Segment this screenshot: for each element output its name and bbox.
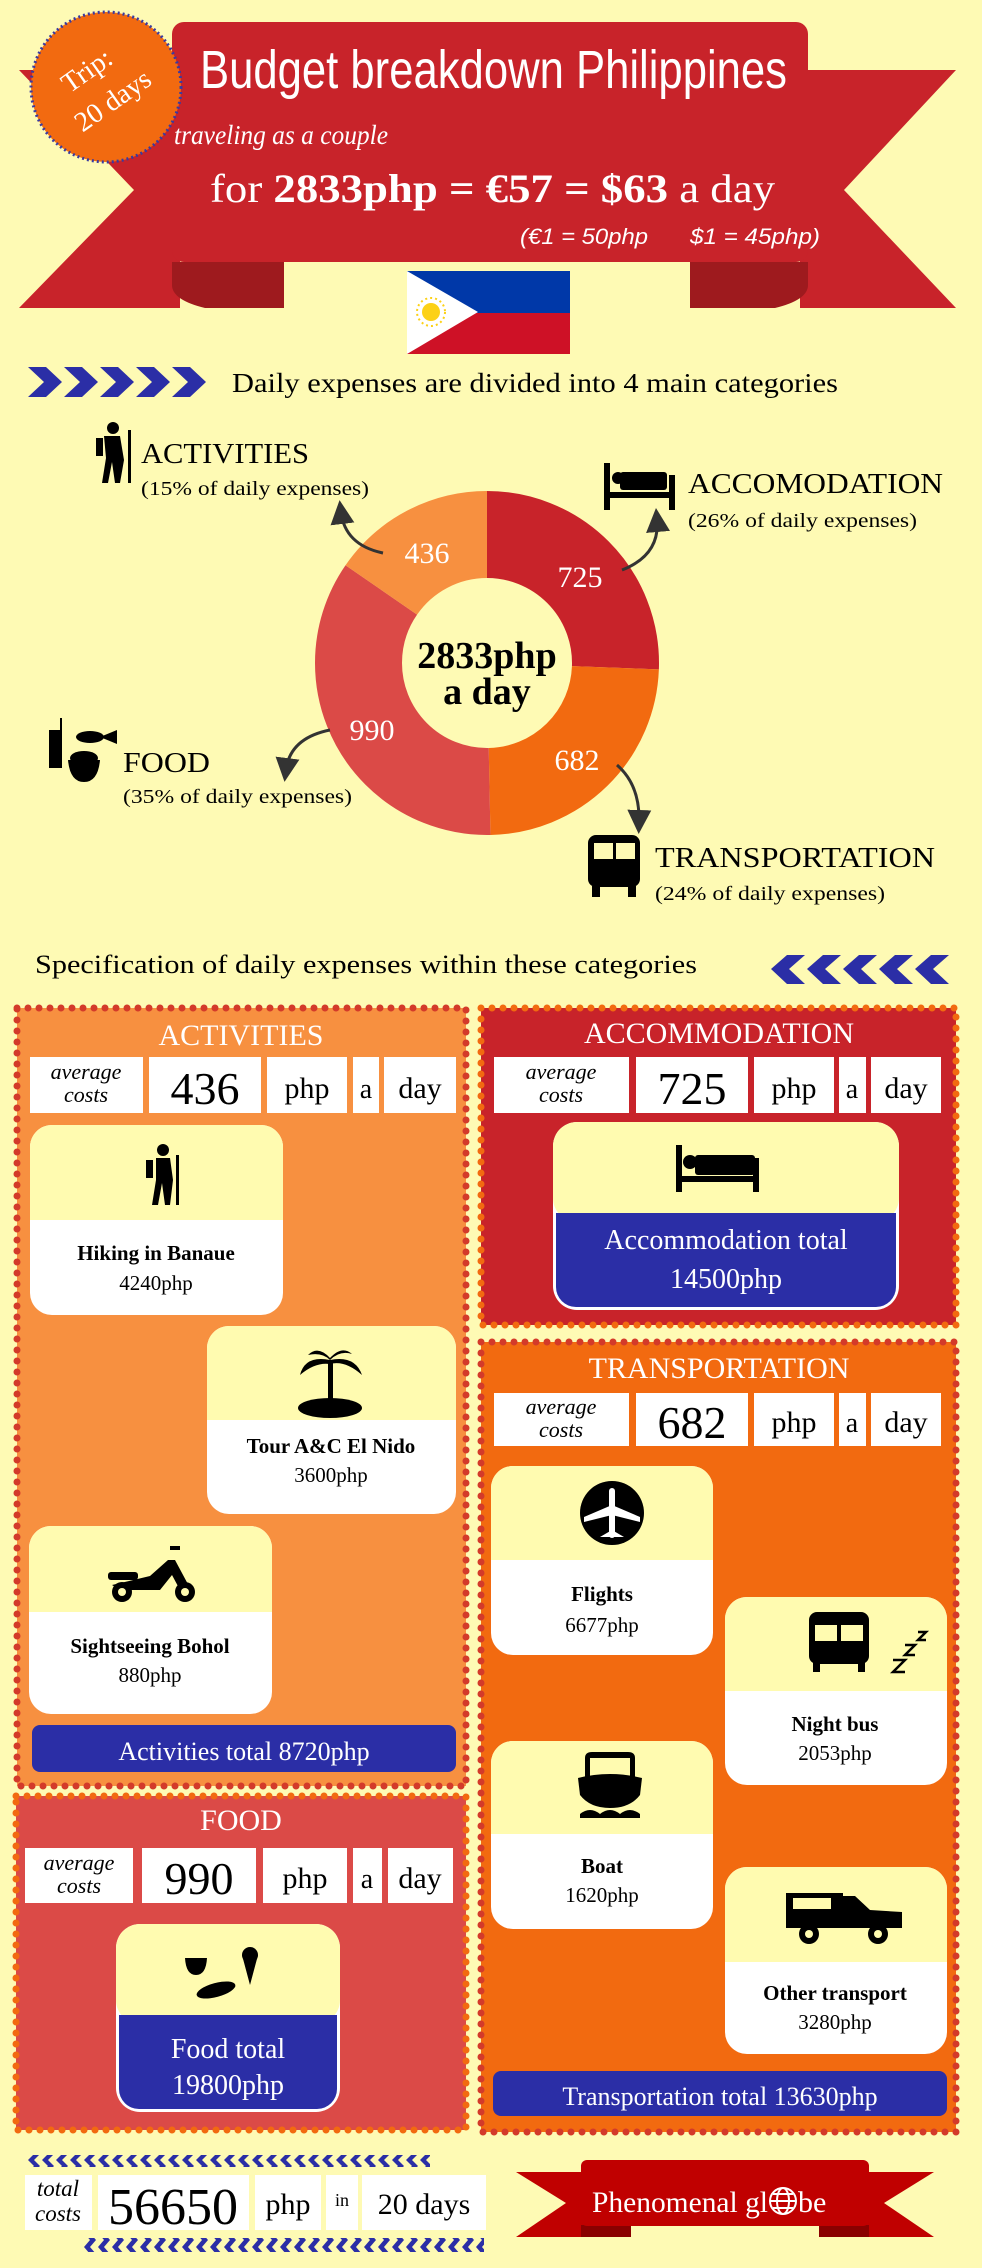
card: sightseeing Bohol: Sightseeing Bohol: [70, 1634, 230, 1658]
legend: activities: [96, 422, 369, 500]
card: flights: 6677php: [565, 1613, 639, 1637]
panel: food: [16, 1796, 466, 2130]
legend: food: [49, 718, 352, 808]
card: other transport: Other transport: [763, 1981, 907, 2005]
total costs row: 20 days: [378, 2188, 470, 2221]
title: Budget breakdown Philippines: [200, 40, 787, 100]
heading: specification: Specification of daily expenses within these categories: [35, 950, 697, 979]
card: night bus: Night bus: [792, 1712, 878, 1736]
legend: activities: ACTIVITIES: [141, 439, 309, 470]
total costs row: [25, 2175, 486, 2236]
total bar: transportation: [493, 2071, 947, 2116]
card: tour El Nido: [207, 1326, 456, 1514]
cost row: food: average: [44, 1850, 115, 1875]
exchange rates: $1 = 45php): [689, 224, 820, 249]
card: night bus: [725, 1597, 947, 1785]
badge: trip 20 days: 20 days: [69, 64, 157, 138]
logo ribbon: Phenomenal globe: [516, 2160, 934, 2237]
cost row: activities: day: [398, 1072, 442, 1105]
cost row: accommodation: [494, 1057, 941, 1114]
cost row: activities: php: [284, 1072, 330, 1105]
card: boat: [491, 1741, 713, 1929]
panel: activities: [17, 1008, 466, 1786]
subtitle: traveling as a couple: [174, 120, 388, 150]
card: accommodation total: [553, 1122, 899, 1310]
cost row: food: a: [361, 1864, 374, 1895]
total costs row: costs: [35, 2201, 81, 2226]
legend: accommodation: (26% of daily expenses): [688, 510, 917, 532]
donut chart: 990: [350, 714, 394, 747]
card: hiking: 4240php: [119, 1271, 193, 1295]
legend: food: (35% of daily expenses): [123, 786, 352, 808]
card: accommodation total: 14500php: [670, 1264, 782, 1295]
cost row: accommodation: day: [884, 1072, 928, 1105]
legend: activities: (15% of daily expenses): [141, 478, 369, 500]
legend: food: FOOD: [123, 748, 210, 779]
card: tour El Nido: 3600php: [294, 1463, 368, 1487]
legend: transportation: (24% of daily expenses): [655, 883, 885, 905]
cost row: food: 990: [164, 1853, 234, 1904]
card: sightseeing Bohol: [29, 1526, 272, 1714]
cost row: food: day: [398, 1862, 442, 1895]
heading: daily expenses: Daily expenses are divided into 4 main categories: [232, 368, 838, 398]
card: food total: 19800php: [172, 2070, 284, 2101]
exchange rates: [520, 224, 820, 249]
card: food total: [116, 1924, 340, 2112]
donut chart: 682: [554, 744, 600, 777]
total costs row: total: [37, 2176, 79, 2201]
legend: transportation: [588, 835, 935, 905]
cost row: activities: 436: [170, 1063, 240, 1114]
exchange rates: (€1 = 50php: [520, 224, 648, 249]
card: sightseeing Bohol: 880php: [118, 1663, 182, 1687]
cost row: activities: average: [51, 1059, 122, 1084]
panel: accommodation: ACCOMMODATION: [584, 1017, 854, 1050]
panel: transportation: [481, 1342, 956, 2132]
chevron strip bottom: [84, 2238, 484, 2252]
legend: accommodation: ACCOMODATION: [688, 469, 943, 500]
panel: transportation: TRANSPORTATION: [589, 1352, 849, 1385]
cost row: accommodation: 725: [658, 1063, 726, 1114]
cost row: activities: a: [360, 1074, 373, 1105]
cost row: accommodation: a: [846, 1074, 859, 1105]
cost row: transportation: [494, 1393, 941, 1448]
panel: accommodation: [481, 1008, 956, 1325]
cost row: accommodation: php: [772, 1072, 816, 1105]
cost row: food: costs: [57, 1873, 101, 1898]
card: flights: [491, 1466, 713, 1655]
daily cost: for 2833php = €57 = $63 a day: [210, 166, 775, 211]
cost row: food: php: [282, 1862, 328, 1895]
cost row: transportation: costs: [539, 1417, 583, 1442]
card: other transport: [725, 1867, 947, 2054]
card: tour El Nido: Tour A&C El Nido: [247, 1434, 415, 1458]
legend: accommodation: [604, 463, 943, 532]
chevron strip top: [28, 2155, 430, 2167]
card: hiking: [30, 1125, 283, 1315]
cost row: transportation: day: [884, 1406, 928, 1439]
donut chart: 436: [404, 537, 450, 570]
header banner: [19, 22, 956, 308]
cost row: transportation: average: [526, 1394, 597, 1419]
arrows: [286, 512, 657, 822]
panel: activities: ACTIVITIES: [159, 1019, 323, 1052]
chevrons right: [28, 367, 206, 397]
total costs row: php: [266, 2188, 310, 2221]
badge: trip 20 days: [31, 12, 181, 162]
cost row: activities: costs: [64, 1082, 108, 1107]
cost row: transportation: php: [772, 1406, 816, 1439]
cost row: transportation: 682: [658, 1397, 726, 1448]
total bar: activities: Activities total 8720php: [118, 1737, 370, 1766]
panel: food: FOOD: [200, 1804, 282, 1837]
legend: transportation: TRANSPORTATION: [655, 843, 935, 874]
total bar: activities: [32, 1725, 456, 1772]
card: night bus: 2053php: [798, 1741, 872, 1765]
cost row: accommodation: average: [526, 1059, 597, 1084]
card: accommodation total: Accommodation total: [604, 1225, 848, 1256]
total bar: transportation: Transportation total 13630php: [562, 2082, 878, 2111]
donut chart: a day: [443, 671, 531, 713]
chevrons left: [771, 955, 949, 984]
cost row: transportation: a: [846, 1408, 859, 1439]
card: flights: Flights: [571, 1582, 633, 1606]
card: hiking: Hiking in Banaue: [77, 1241, 235, 1265]
cost row: food: [25, 1848, 453, 1904]
donut chart: 2833php: [417, 635, 557, 677]
card: boat: Boat: [581, 1854, 623, 1878]
donut chart: 725: [558, 561, 602, 594]
card: food total: Food total: [171, 2034, 285, 2065]
logo ribbon: Phenomenal globe: be: [798, 2186, 826, 2219]
card: other transport: 3280php: [798, 2010, 872, 2034]
total costs row: 56650: [108, 2179, 238, 2236]
logo ribbon: Phenomenal globe: Phenomenal gl: [592, 2186, 768, 2219]
cost row: activities: [30, 1057, 456, 1114]
badge: trip 20 days: Trip:: [56, 43, 119, 100]
cost row: accommodation: costs: [539, 1082, 583, 1107]
donut chart: [350, 534, 616, 792]
card: boat: 1620php: [565, 1883, 639, 1907]
flag: Philippines: [407, 271, 570, 354]
total costs row: in: [335, 2190, 349, 2210]
